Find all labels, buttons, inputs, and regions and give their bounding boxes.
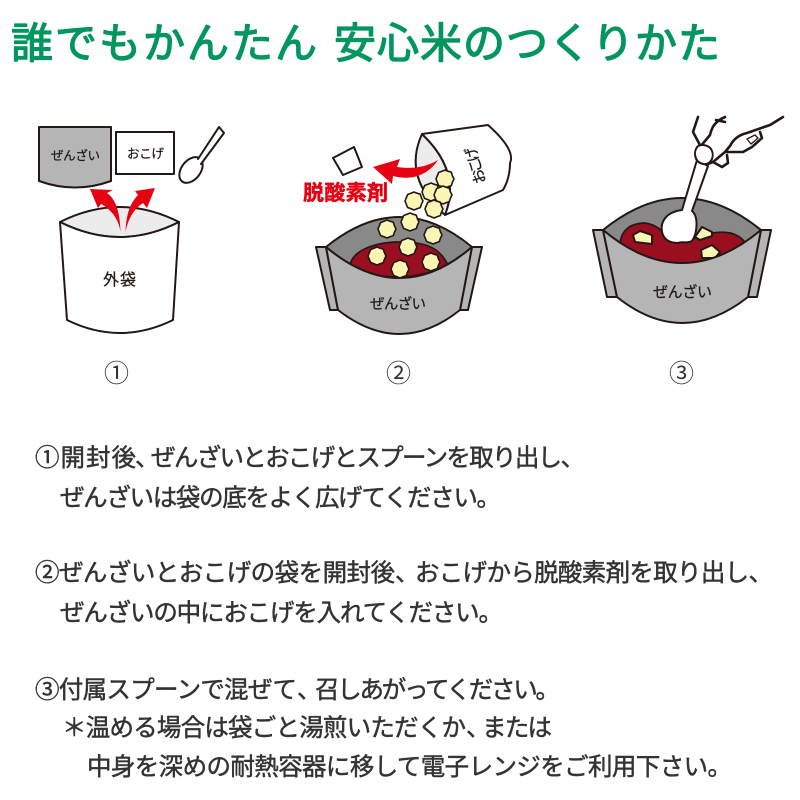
okoge packet — [116, 132, 174, 174]
instruction 3: 中身を深めの耐熱容器に移して電子レンジをご利用下さい。 — [87, 753, 732, 781]
pouch — [593, 198, 771, 323]
instruction 1: ぜんざいは袋の底をよく広げてください。 — [60, 483, 501, 512]
instruction 1: ①開封後 — [35, 444, 136, 472]
pouch with zenzai — [316, 217, 482, 334]
pouch with zenzai: ぜんざい — [370, 295, 426, 313]
pouch: ぜんざい — [653, 283, 712, 301]
deoxidizer packet — [333, 147, 362, 175]
okoge pieces — [633, 227, 720, 258]
instruction 2: ぜんざいの中におこげを入れてください。 — [60, 598, 503, 627]
instruction 1 — [35, 443, 585, 512]
instruction 3: または — [482, 715, 552, 742]
instruction 1: ぜんざいとおこげとスプーンを取り出し、 — [151, 443, 585, 472]
title: 安心米のつくりかた — [334, 20, 720, 67]
illustration: step 1 — [39, 127, 224, 333]
step number 2: ② — [386, 360, 411, 388]
instruction 2: おこげから脱酸素剤を取り出し、 — [415, 559, 773, 587]
okoge cup tilted — [405, 125, 511, 218]
okoge pieces in pouch — [368, 213, 442, 278]
instruction 3: 召しあがってください。 — [315, 676, 560, 704]
okoge cup tilted: おこげ — [462, 144, 490, 186]
instruction 3 — [35, 676, 732, 781]
zenzai pouch — [39, 127, 111, 188]
outer bag: 外袋 — [103, 271, 136, 289]
title — [11, 20, 720, 67]
instructions text — [35, 443, 773, 781]
instruction 3: ③付属スプーンで混ぜて — [35, 676, 297, 704]
instruction 3: 、 — [297, 677, 322, 704]
spoon — [662, 160, 708, 243]
instruction 2: ②ぜんざいとおこげの袋を開封後 — [35, 558, 395, 587]
instruction 2: 、 — [395, 560, 420, 587]
icon: spoon — [175, 127, 224, 187]
illustration: step 3 — [593, 117, 783, 323]
instruction 3: 、 — [466, 715, 490, 742]
okoge packet: おこげ — [127, 147, 164, 161]
outer bag — [60, 207, 179, 333]
label: deoxidizer: 脱酸素剤 — [303, 182, 388, 205]
title: 誰でもかんたん — [11, 20, 317, 67]
zenzai pouch: ぜんざい — [51, 148, 100, 163]
hand — [693, 117, 783, 167]
illustration: step 2 — [303, 125, 511, 334]
arrows: red out of bag — [90, 188, 155, 232]
arrow: red to packet — [373, 159, 438, 184]
instruction 3: ＊温める場合は袋ごと湯煎いただくか — [62, 714, 466, 742]
instruction 1: 、 — [135, 445, 160, 472]
instruction 2 — [35, 558, 773, 627]
step number 3: ③ — [669, 360, 694, 388]
step number 1: ① — [104, 360, 129, 388]
